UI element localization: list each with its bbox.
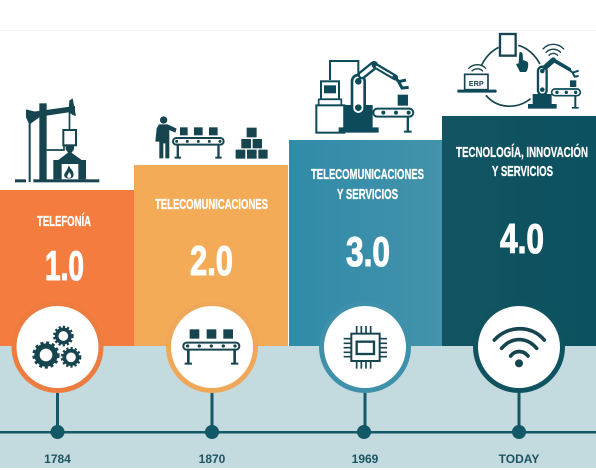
- icon: conveyor belt: [183, 329, 239, 365]
- heading: telecomunicaciones y servicios: Y SERVICIOS: [337, 186, 398, 203]
- number: 3.0: 3.0: [346, 228, 390, 275]
- bar: 2.0: [134, 165, 288, 346]
- icon: gears: [34, 327, 80, 367]
- icon: worker and conveyor with boxes: [155, 116, 268, 159]
- timeline node: 1784: [12, 301, 104, 466]
- year: 1784: 1784: [44, 452, 71, 466]
- number: 4.0: 4.0: [500, 215, 544, 262]
- icon: industrial robot arm with computer: [316, 61, 413, 133]
- label: ERP: ERP: [469, 81, 484, 88]
- year: today: TODAY: [499, 452, 539, 466]
- icon: connected ERP, tablet and robot: [457, 34, 580, 109]
- heading: tecnología, innovación y servicios: [456, 143, 588, 180]
- timeline axis: [0, 431, 596, 434]
- number: 1.0: 1.0: [45, 242, 84, 289]
- heading: telecomunicaciones y servicios: [311, 166, 424, 203]
- bar: 1.0: [0, 190, 134, 346]
- heading: tecnología, innovación y servicios: Y SERVICIOS: [492, 163, 553, 180]
- icon: microchip: [344, 326, 387, 369]
- timeline band: [0, 346, 596, 468]
- heading: telecomunicaciones: TELECOMUNICACIONES: [155, 196, 268, 213]
- timeline node: 1870: [166, 301, 258, 466]
- icon: oil pump: [15, 98, 99, 182]
- bar: 3.0: [289, 140, 442, 346]
- year: 1870: 1870: [199, 452, 226, 466]
- timeline node: today: [473, 301, 565, 466]
- number: 2.0: 2.0: [190, 237, 233, 284]
- year: 1969: 1969: [352, 452, 379, 466]
- bar: 4.0: [442, 116, 596, 346]
- heading: telefonía: TELEFONÍA: [37, 213, 91, 230]
- heading: telecomunicaciones y servicios: TELECOMUNICACIONES: [311, 166, 424, 183]
- icon: wifi: [494, 329, 544, 367]
- timeline node: 1969: [319, 301, 411, 466]
